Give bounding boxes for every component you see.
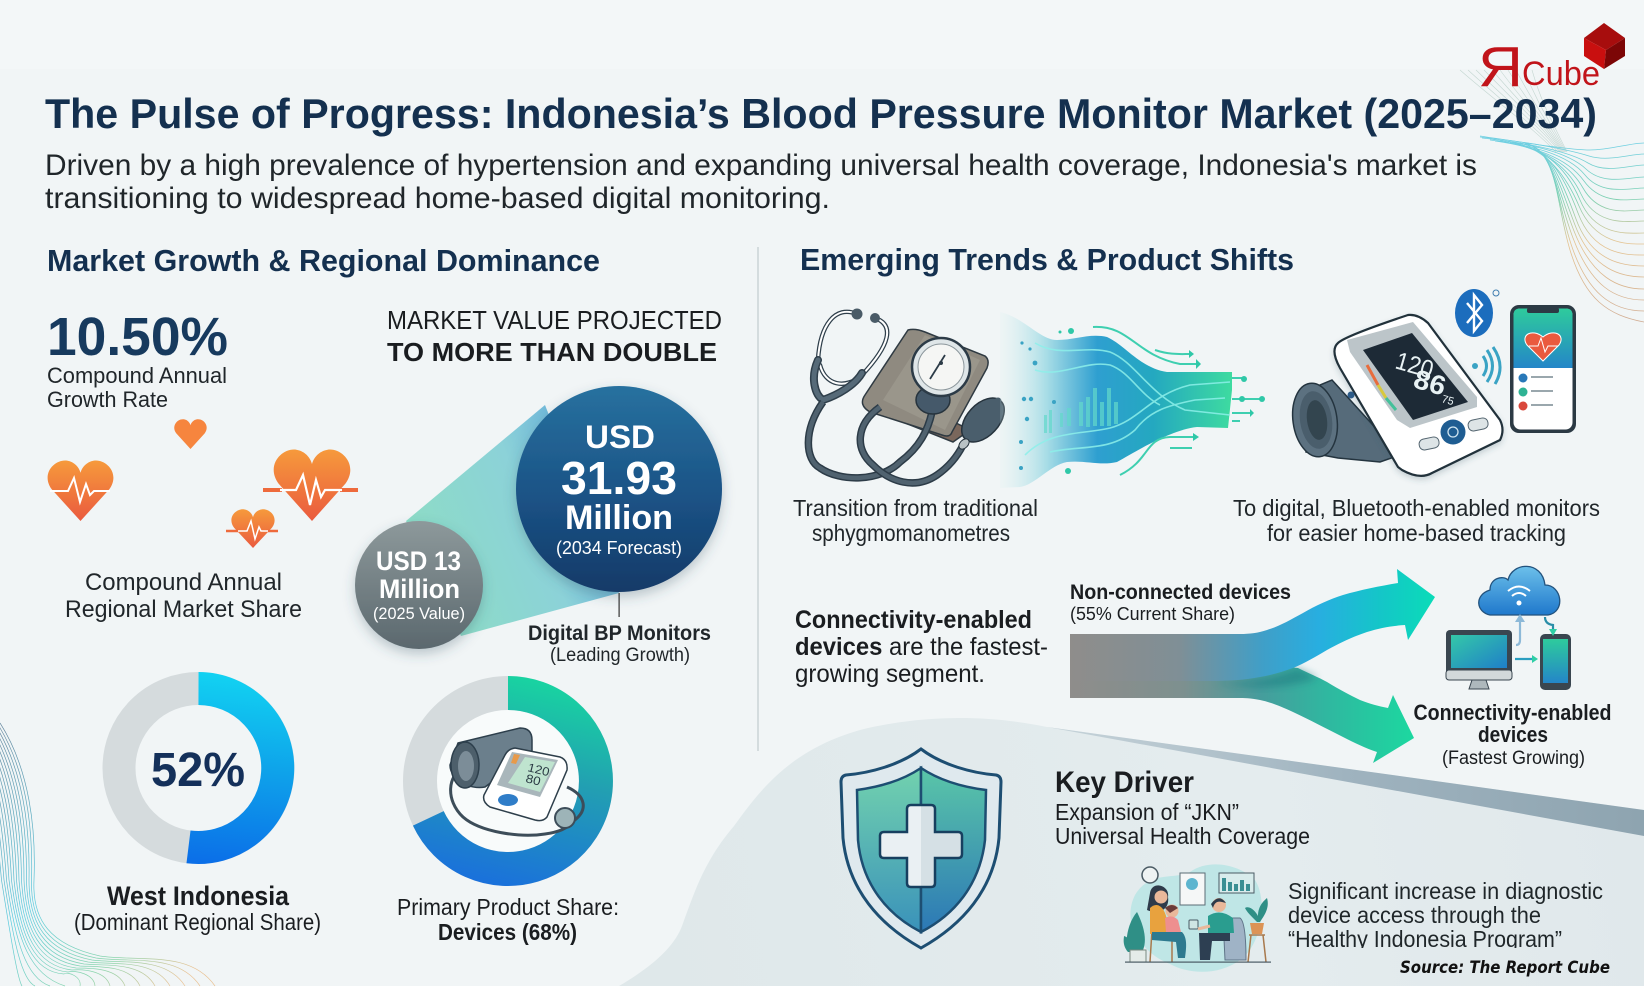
caption: regional market share — [65, 569, 302, 623]
bubble: 2034 forecast: (2034 Forecast) — [556, 538, 682, 558]
chart: market value growth bubbles — [355, 386, 722, 649]
label: west indonesia: West Indonesia — [107, 881, 290, 911]
heading: emerging trends: Emerging Trends & Product Shifts — [800, 242, 1294, 277]
icon: smartphone app — [1510, 305, 1576, 433]
icon: health shield — [841, 749, 1001, 948]
bubble: 2025 value: Million — [379, 574, 460, 604]
label: connectivity-enabled devices: Connectivity-enabled — [1414, 700, 1612, 725]
icon: digital bluetooth monitor: 120 — [1392, 347, 1437, 384]
text: healthy indonesia program — [1288, 882, 1602, 948]
text: key driver: Universal Health Coverage — [1055, 823, 1310, 849]
text: key driver: Expansion of “JKN” — [1055, 799, 1239, 825]
icon: monitor with cuff — [450, 728, 583, 835]
icon: digital bluetooth monitor: 75 — [1440, 393, 1455, 408]
subtitle: transitioning to widespread home-based digital monitoring. — [45, 182, 830, 215]
label: west indonesia — [74, 881, 321, 935]
panel: key driver — [841, 749, 1610, 978]
label: primary product share: Devices (68%) — [438, 919, 577, 945]
bubble: 2034 forecast: 31.93 — [561, 452, 677, 504]
icon: connected devices and cloud — [1446, 566, 1571, 690]
arrows: market split — [1070, 569, 1435, 763]
icon: monitor with cuff: 120 — [526, 760, 551, 779]
icon: bluetooth — [1455, 289, 1499, 337]
bubble: 2034 forecast: Million — [565, 499, 673, 537]
caption: regional market share: Compound Annual — [85, 569, 282, 596]
panel: emerging trends and product shifts — [793, 242, 1612, 769]
bubble: 2025 value — [355, 521, 483, 649]
graphic: analog to digital data flow — [1000, 312, 1265, 488]
CAGR stat: 10.50% — [47, 307, 228, 367]
donut chart: west indonesia 52%: 52% — [151, 744, 245, 797]
captions: device transition: To digital, Bluetooth-enabled monitors — [1233, 495, 1600, 521]
text: connectivity growth: growing segment. — [795, 660, 985, 688]
monitor body — [1334, 315, 1502, 476]
callout: digital BP monitors: Digital BP Monitors — [528, 622, 711, 645]
label: connectivity-enabled devices: devices — [1478, 722, 1548, 747]
subtitle — [45, 149, 1477, 215]
text: healthy indonesia program: “Healthy Indonesia Program” — [1288, 926, 1562, 952]
label: non-connected devices: (55% Current Share) — [1070, 604, 1235, 624]
text: connectivity growth: devices are the fastest- — [795, 633, 1048, 661]
label: primary product share: Primary Product Share: — [397, 894, 619, 920]
bubble: 2034 forecast: USD — [585, 419, 655, 455]
bubble: 2025 value: (2025 Value) — [373, 604, 465, 623]
label: connectivity-enabled devices: (Fastest Growing) — [1442, 748, 1585, 769]
icon: wireless signal — [1472, 347, 1500, 384]
subtitle: Driven by a high prevalence of hypertension and expanding universal health coverage, Indonesia's market is — [45, 149, 1477, 182]
text: healthy indonesia program: device access through the — [1288, 902, 1541, 928]
cuff roll — [1288, 380, 1400, 462]
bubble: 2025 value: USD 13 — [376, 546, 461, 576]
label: primary product share — [397, 894, 619, 945]
text: connectivity growth — [795, 606, 1048, 688]
text: healthy indonesia program: Significant increase in diagnostic — [1288, 878, 1603, 904]
icon: digital bluetooth monitor: 86 — [1410, 364, 1449, 402]
text: key driver — [1055, 766, 1310, 849]
icon: hearts with pulse lines — [48, 419, 358, 548]
market value heading: TO MORE THAN DOUBLE — [387, 337, 717, 367]
bottom background blob — [619, 718, 1644, 986]
callout: digital BP monitors: (Leading Growth) — [550, 645, 690, 666]
market value heading — [387, 305, 722, 367]
captions: device transition: Transition from traditional — [793, 495, 1038, 521]
logo: RCube: Cube — [1522, 55, 1600, 93]
panel: market growth and regional dominance — [47, 243, 722, 945]
icon: digital bluetooth monitor — [1288, 315, 1502, 476]
label: non-connected devices: Non-connected devices — [1070, 581, 1291, 604]
captions: device transition: for easier home-based tracking — [1267, 520, 1566, 546]
market value heading: MARKET VALUE PROJECTED — [387, 305, 722, 335]
label: connectivity-enabled devices — [1414, 700, 1612, 769]
bubble: 2034 forecast — [516, 386, 722, 592]
cone between bubbles — [406, 405, 619, 636]
caption: regional market share: Regional Market Share — [65, 596, 302, 623]
text: connectivity growth: Connectivity-enabled — [795, 606, 1032, 634]
callout: digital BP monitors — [528, 593, 711, 666]
icon: family at clinic — [1124, 864, 1271, 972]
logo: RCube: Я — [1478, 35, 1523, 99]
CAGR stat: Growth Rate — [47, 387, 168, 412]
decorative wave: top right — [1460, 70, 1644, 322]
divider — [758, 247, 759, 751]
source note: Source: The Report Cube — [1400, 958, 1610, 978]
label: west indonesia: (Dominant Regional Share) — [74, 909, 321, 935]
grey diagonal wedge — [1047, 727, 1644, 836]
title: The Pulse of Progress: Indonesia’s Blood Pressure Monitor Market (2025–2034) — [45, 90, 1597, 137]
donut chart: primary product share 68% — [420, 693, 596, 869]
CAGR stat — [47, 307, 228, 412]
donut chart: west indonesia 52% — [119, 688, 278, 848]
icon: traditional sphygmomanometer — [808, 308, 1012, 483]
icon: monitor with cuff: 80 — [524, 771, 543, 789]
label: non-connected devices — [1070, 581, 1291, 624]
CAGR stat: Compound Annual — [47, 363, 227, 388]
heading: market growth: Market Growth & Regional Dominance — [47, 243, 600, 278]
captions: device transition — [793, 495, 1600, 546]
decorative wave: bottom left — [0, 723, 215, 986]
logo: RCube — [1478, 23, 1625, 99]
captions: device transition: sphygmomanometres — [812, 520, 1010, 546]
text: key driver: Key Driver — [1055, 766, 1194, 799]
